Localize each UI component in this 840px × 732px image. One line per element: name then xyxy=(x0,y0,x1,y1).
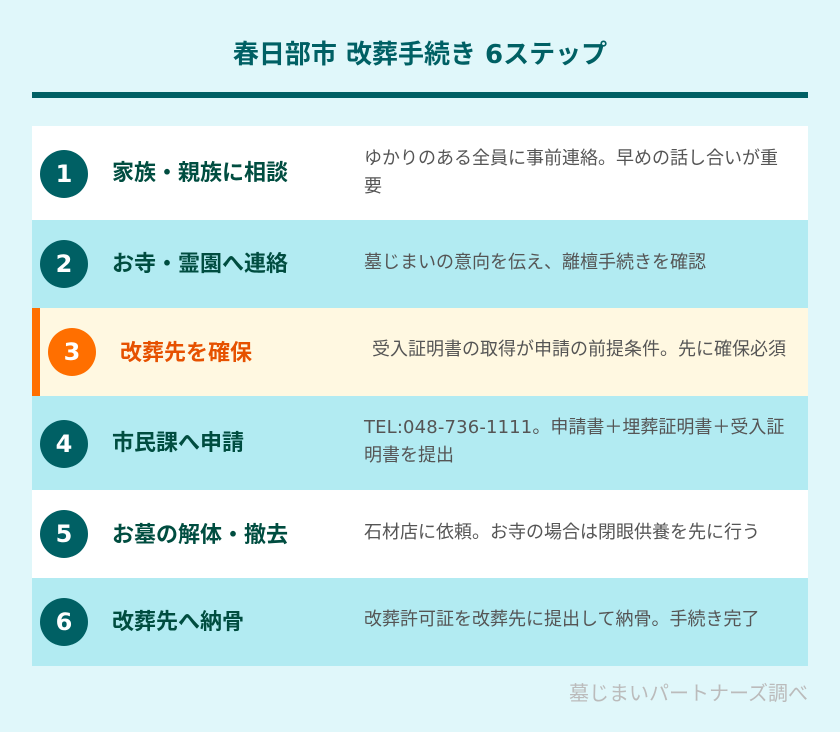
step 3 panel highlighted xyxy=(32,308,808,396)
step 4 description: TEL:048-736-1111。申請書＋埋葬証明書＋受入証明書を提出 xyxy=(364,417,784,466)
step 1 number badge: 1 xyxy=(56,160,72,188)
step 4 heading: 市民課へ申請 xyxy=(112,431,244,456)
step 2 heading: お寺・霊園へ連絡 xyxy=(112,252,288,277)
step 4 number badge xyxy=(40,420,88,468)
step 3 description: 受入証明書の取得が申請の前提条件。先に確保必須 xyxy=(372,339,786,360)
source note: 墓じまいパートナーズ調べ xyxy=(569,681,808,705)
step 1 description: ゆかりのある全員に事前連絡。早めの話し合いが重要 xyxy=(364,148,778,197)
step 2 description: 墓じまいの意向を伝え、離檀手続きを確認 xyxy=(364,252,706,273)
step 3 number badge: 3 xyxy=(64,338,80,366)
title: 春日部市 改葬手続き 6ステップ xyxy=(233,40,607,70)
step 3 number badge xyxy=(48,328,96,376)
title rule xyxy=(32,92,808,98)
step 1 heading: 家族・親族に相談 xyxy=(112,161,288,186)
step 6 number badge: 6 xyxy=(56,608,72,636)
step 2 number badge xyxy=(40,240,88,288)
step 5 number badge xyxy=(40,510,88,558)
step 1 panel xyxy=(32,126,808,220)
step 6 description: 改葬許可証を改葬先に提出して納骨。手続き完了 xyxy=(364,609,759,630)
step 3 heading: 改葬先を確保 xyxy=(120,341,252,366)
step 2 panel xyxy=(32,220,808,308)
step 1 number badge xyxy=(40,150,88,198)
step 5 panel xyxy=(32,490,808,578)
step 4 number badge: 4 xyxy=(56,430,72,458)
step 4 panel xyxy=(32,396,808,490)
step 6 panel xyxy=(32,578,808,666)
step 5 heading: お墓の解体・撤去 xyxy=(112,523,288,548)
step 2 number badge: 2 xyxy=(56,250,72,278)
step 6 heading: 改葬先へ納骨 xyxy=(112,610,244,635)
step 5 number badge: 5 xyxy=(56,520,72,548)
step 5 description: 石材店に依頼。お寺の場合は閉眼供養を先に行う xyxy=(364,522,760,543)
step 6 number badge xyxy=(40,598,88,646)
